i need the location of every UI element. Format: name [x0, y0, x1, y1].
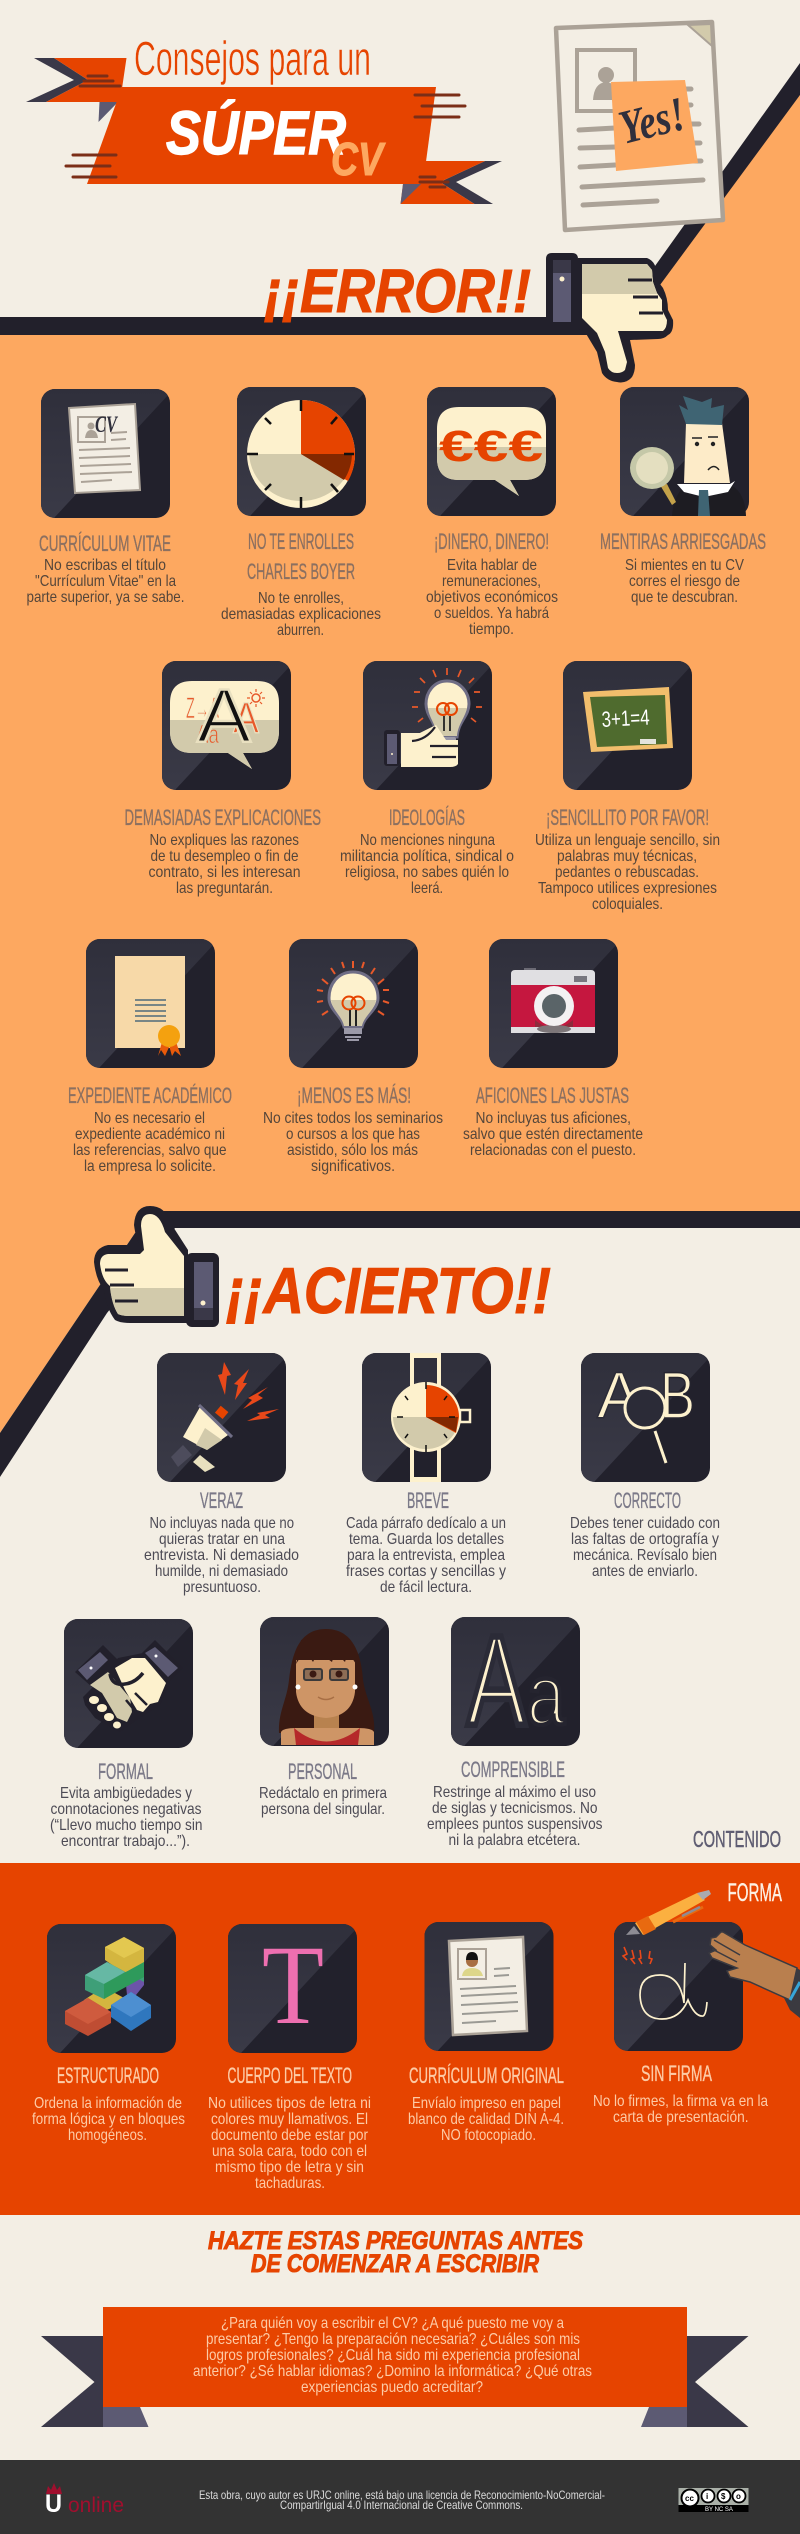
- heading: IDEOLOGÍAS: [389, 805, 465, 830]
- heading: COMPRENSIBLE: [461, 1757, 565, 1782]
- text block: palabras muy técnicas,: [557, 848, 697, 865]
- panel: breve: [346, 1353, 506, 1596]
- text block: de siglas y tecnicismos. No: [432, 1800, 598, 1817]
- text block: Ordena la información de: [34, 2095, 182, 2112]
- panel: correcto: [570, 1353, 720, 1580]
- text block: [221, 590, 381, 639]
- heading: CURRÍCULUM ORIGINAL: [409, 2063, 564, 2088]
- text block: No lo firmes, la firma va en la: [593, 2093, 768, 2110]
- text block: salvo que estén directamente: [463, 1126, 643, 1143]
- icon: handshake: [64, 1619, 193, 1748]
- text block: o cursos a los que has: [286, 1126, 420, 1143]
- icon: yes resume paper: [556, 22, 723, 230]
- text block: [463, 1110, 643, 1159]
- cc badge: i: [706, 2492, 708, 2501]
- icon: wristwatch: [362, 1353, 491, 1482]
- panel: demasiadas explicaciones: [124, 661, 321, 897]
- text block: antes de enviarlo.: [592, 1563, 698, 1580]
- panel: cuerpo del texto: [208, 1923, 371, 2192]
- text block: asistido, sólo los más: [287, 1142, 418, 1159]
- cc badge: [678, 2488, 748, 2513]
- heading: preguntas: [208, 2227, 583, 2278]
- text block: frases cortas y sencillas y: [346, 1563, 506, 1580]
- icon: letters speech bubble: Z→A: [186, 692, 219, 725]
- panel: expediente academico: [68, 939, 232, 1175]
- heading: VERAZ: [200, 1488, 243, 1513]
- icon: clock: [237, 387, 366, 516]
- heading: NO TE ENROLLES: [248, 529, 354, 554]
- cc badge: o: [736, 2492, 741, 2501]
- panel: curriculum original: [408, 1922, 564, 2144]
- text block: la empresa lo solicite.: [84, 1158, 216, 1175]
- text block: expediente académico ni: [75, 1126, 225, 1143]
- text block: [26, 557, 184, 606]
- text block: entrevista. Ni demasiado: [144, 1547, 299, 1564]
- heading: CHARLES BOYER: [247, 559, 355, 584]
- icon: letters and magnifier: B: [660, 1358, 695, 1432]
- heading: AFICIONES LAS JUSTAS: [476, 1083, 629, 1108]
- text block: Restringe al máximo el uso: [433, 1784, 596, 1801]
- text block: forma lógica y en bloques: [32, 2111, 185, 2128]
- text block: tachaduras.: [255, 2175, 325, 2192]
- heading: CORRECTO: [614, 1488, 681, 1513]
- icon: Aa letters: A: [467, 1610, 526, 1753]
- text block: mecánica. Revísalo bien: [573, 1547, 717, 1564]
- section: forma background: [0, 1863, 800, 2215]
- icon: signing hand and pen: [614, 1890, 800, 2051]
- heading: ¡MENOS ES MÁS!: [297, 1083, 411, 1108]
- icon: resume with photo: [424, 1922, 554, 2051]
- text block: documento debe estar por: [211, 2127, 369, 2144]
- icon: Aa letters: [451, 1610, 580, 1753]
- heading: preguntas: HAZTE ESTAS PREGUNTAS ANTES: [208, 2227, 583, 2255]
- text block: de tu desempleo o fin de: [150, 848, 299, 865]
- text block: No utilices tipos de letra ni: [208, 2095, 371, 2112]
- text block: "Currículum Vitae" en la: [35, 573, 176, 590]
- text block: aburren.: [277, 622, 324, 639]
- text block: leerá.: [411, 880, 443, 897]
- text block: [593, 2093, 768, 2126]
- icon: hand holding bulb: [363, 661, 492, 790]
- text block: NO fotocopiado.: [441, 2127, 536, 2144]
- heading: SIN FIRMA: [641, 2061, 712, 2086]
- title line 1: Consejos para un: [134, 33, 371, 86]
- heading: [247, 529, 355, 584]
- text block: No te enrolles,: [258, 590, 344, 607]
- text block: relacionadas con el puesto.: [470, 1142, 636, 1159]
- text block: las faltas de ortografía y: [571, 1531, 719, 1548]
- text block: [148, 832, 300, 897]
- text block: connotaciones negativas: [50, 1801, 202, 1818]
- text block: blanco de calidad DIN A-4.: [408, 2111, 564, 2128]
- icon: letters and magnifier: [581, 1353, 710, 1482]
- text block: [263, 1110, 443, 1175]
- panel: no te enrolles: [221, 387, 381, 639]
- text block: No menciones ninguna: [360, 832, 495, 849]
- text block: experiencias puedo acreditar?: [301, 2379, 483, 2396]
- text block: Utiliza un lenguaje sencillo, sin: [535, 832, 720, 849]
- panel: curriculum vitae: [26, 389, 184, 606]
- panel: estructurado: [32, 1924, 185, 2144]
- text block: [340, 832, 514, 897]
- text block: ni la palabra etcétera.: [448, 1832, 580, 1849]
- text block: las preguntarán.: [176, 880, 273, 897]
- text block: [570, 1515, 720, 1580]
- text block: tema. Guarda los detalles: [349, 1531, 504, 1548]
- text block: [144, 1515, 299, 1596]
- text block: demasiadas explicaciones: [221, 606, 381, 623]
- panel: mentiras arriesgadas: [600, 387, 766, 606]
- icon: woman portrait: [260, 1617, 389, 1746]
- icon: letters speech bubble: Aa: [196, 719, 219, 749]
- heading: ESTRUCTURADO: [57, 2063, 159, 2088]
- text block: Evita hablar de: [447, 557, 537, 574]
- text block: [32, 2095, 185, 2144]
- text block: coloquiales.: [592, 896, 663, 913]
- license text: CompartirIgual 4.0 Internacional de Creative Commons.: [280, 2498, 523, 2512]
- heading: preguntas: DE COMENZAR A ESCRIBIR: [251, 2250, 539, 2278]
- text block: significativos.: [311, 1158, 395, 1175]
- text block: homogéneos.: [68, 2127, 147, 2144]
- icon: lego bricks: [47, 1924, 176, 2053]
- text block: parte superior, ya se sabe.: [26, 589, 184, 606]
- text block: de fácil lectura.: [380, 1579, 472, 1596]
- text block: No cites todos los seminarios: [263, 1110, 443, 1127]
- heading: FORMAL: [98, 1759, 153, 1784]
- panel: sin firma: [593, 1890, 800, 2126]
- text block: No escribas el título: [44, 557, 166, 574]
- heading: PERSONAL: [288, 1759, 357, 1784]
- icon: euro speech bubble: [427, 387, 556, 516]
- panel: aficiones: [463, 939, 643, 1159]
- text block: una sola cara, todo con el: [212, 2143, 367, 2160]
- text block: militancia política, sindical o: [340, 848, 514, 865]
- icon: euro speech bubble: €€€: [439, 422, 543, 471]
- icon: chalkboard: 3+1=4: [601, 705, 650, 732]
- text block: No expliques las razones: [150, 832, 299, 849]
- panel: sencillito: [535, 661, 720, 913]
- text block: ¿Para quién voy a escribir el CV? ¿A qué puesto me voy a: [221, 2315, 564, 2332]
- icon: megaphone: [157, 1353, 286, 1482]
- title line 2: SÚPER: [166, 99, 346, 167]
- text block: emplees puntos suspensivos: [427, 1816, 602, 1833]
- icon: letters speech bubble: A: [233, 694, 260, 743]
- heading: CURRÍCULUM VITAE: [39, 531, 171, 556]
- text block: para la entrevista, emplea: [347, 1547, 505, 1564]
- sticky note text: Yes!: [614, 87, 691, 155]
- text block: remuneraciones,: [442, 573, 541, 590]
- text block: Redáctalo en primera: [259, 1785, 387, 1802]
- icon: letters speech bubble: A: [197, 674, 251, 759]
- text block: No incluyas nada que no: [150, 1515, 294, 1532]
- icon: cv paper: CV: [95, 412, 118, 437]
- horizontal band error: [0, 317, 590, 335]
- logo: [45, 2483, 124, 2518]
- text block: carta de presentación.: [613, 2109, 748, 2126]
- heading: BREVE: [407, 1488, 449, 1513]
- heading: CUERPO DEL TEXTO: [228, 2063, 352, 2088]
- text block: humilde, ni demasiado: [155, 1563, 288, 1580]
- text block: Evita ambigüedades y: [60, 1785, 192, 1802]
- text block: (“Llevo mucho tiempo sin: [50, 1817, 202, 1834]
- icon: cv paper: [41, 389, 170, 518]
- icon: letters and magnifier: A: [597, 1358, 641, 1432]
- heading: acierto: ¡¡ACIERTO!!: [226, 1254, 551, 1327]
- text block: o sueldos. Ya habrá: [434, 605, 549, 622]
- orange background section: [0, 95, 800, 1433]
- text block: logros profesionales? ¿Cuál ha sido mi experiencia profesional: [206, 2347, 580, 2364]
- icon: light bulb: [289, 939, 418, 1068]
- text block: colores muy llamativos. El: [211, 2111, 368, 2128]
- text block: No es necesario el: [94, 1110, 205, 1127]
- text block: No incluyas tus aficiones,: [476, 1110, 631, 1127]
- text block: Debes tener cuidado con: [570, 1515, 720, 1532]
- cc badge: $: [721, 2492, 726, 2501]
- panel: formal: [50, 1619, 202, 1850]
- icon: letters speech bubble: [162, 661, 291, 790]
- text block: [73, 1110, 227, 1175]
- horizontal band acierto: [160, 1211, 800, 1228]
- text block: quieras tratar en una: [159, 1531, 285, 1548]
- text block: religiosa, no sabes quién lo: [345, 864, 509, 881]
- diagonal band top: [645, 63, 800, 285]
- text block: [625, 557, 744, 606]
- text block: [427, 1784, 602, 1849]
- text block: presentar? ¿Tengo la preparación necesaria? ¿Cuáles son mis: [206, 2331, 580, 2348]
- icon: diploma: [86, 939, 215, 1068]
- text block: [193, 2315, 592, 2396]
- text block: tiempo.: [469, 621, 514, 638]
- text block: encontrar trabajo...”).: [61, 1833, 190, 1850]
- text block: Envíalo impreso en papel: [412, 2095, 561, 2112]
- text block: que te descubran.: [631, 589, 738, 606]
- text block: corres el riesgo de: [629, 573, 740, 590]
- text block: las referencias, salvo que: [73, 1142, 227, 1159]
- logo: U: [45, 2490, 62, 2518]
- heading: EXPEDIENTE ACADÉMICO: [68, 1083, 232, 1108]
- license text: [199, 2488, 605, 2512]
- heading: ¡DINERO, DINERO!: [434, 529, 549, 554]
- icon: pink T: [228, 1923, 357, 2053]
- icon: thumb up: [94, 1206, 219, 1327]
- ribbon: preguntas: [41, 2307, 748, 2427]
- title ribbon: [26, 33, 502, 204]
- icon: man with magnifier: [620, 387, 749, 516]
- text block: Si mientes en tu CV: [625, 557, 744, 574]
- footer: [0, 2460, 800, 2534]
- panel: personal: [259, 1617, 389, 1818]
- heading: error: ¡¡ERROR!!: [264, 257, 531, 325]
- text block: [346, 1515, 506, 1596]
- cc badge: BY NC SA: [705, 2507, 733, 2513]
- icon: Aa letters: a: [527, 1648, 565, 1742]
- panel: comprensible: [427, 1610, 602, 1849]
- text block: [259, 1785, 387, 1818]
- text block: [535, 832, 720, 913]
- icon: pink T: T: [262, 1923, 324, 2048]
- text block: objetivos económicos: [426, 589, 558, 606]
- text block: pedantes o rebuscadas.: [555, 864, 699, 881]
- panel: menos es mas: [263, 939, 443, 1175]
- diagonal band acierto: [0, 1211, 175, 1477]
- panel: veraz: [144, 1353, 299, 1596]
- text block: [426, 557, 558, 638]
- text block: contrato, si les interesan: [148, 864, 300, 881]
- panel: dinero: [426, 387, 558, 638]
- text block: Cada párrafo dedícalo a un: [346, 1515, 506, 1532]
- text block: [50, 1785, 202, 1850]
- logo: online: [68, 2494, 124, 2517]
- license text: Esta obra, cuyo autor es URJC online, está bajo una licencia de Reconocimiento-NoComercial-: [199, 2488, 605, 2502]
- cc badge: cc: [685, 2494, 694, 2503]
- text block: persona del singular.: [261, 1801, 385, 1818]
- icon: chalkboard: [563, 661, 692, 790]
- icon: thumb down: [546, 253, 673, 382]
- text block: presuntuoso.: [183, 1579, 261, 1596]
- text block: [408, 2095, 564, 2144]
- text block: Tampoco utilices expresiones: [538, 880, 717, 897]
- text block: anterior? ¿Sé hablar idiomas? ¿Domino la informática? ¿Qué otras: [193, 2363, 592, 2380]
- panel: ideologias: [340, 661, 514, 897]
- icon: camera: [489, 939, 618, 1068]
- heading: DEMASIADAS EXPLICACIONES: [124, 805, 321, 830]
- text block: [208, 2095, 371, 2192]
- title line 3: CV: [331, 133, 386, 185]
- text block: mismo tipo de letra y sin: [215, 2159, 364, 2176]
